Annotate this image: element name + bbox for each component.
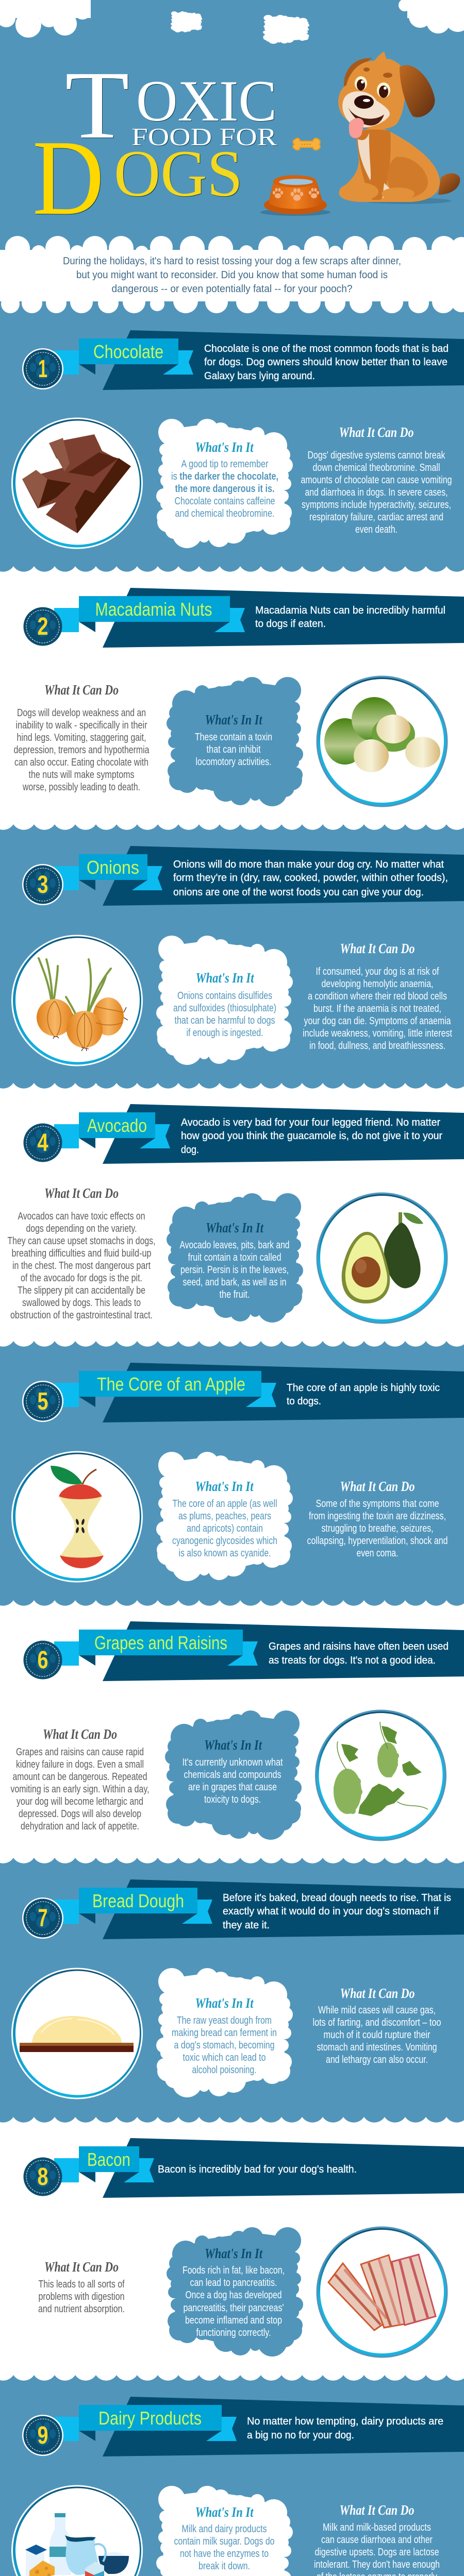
badge: number 9: 9 bbox=[37, 2422, 48, 2449]
callout: what's in it: that can be harmful to dogs bbox=[174, 1015, 275, 1026]
text block: what it can do: The slippery pit can accidentally be bbox=[18, 1285, 145, 1296]
icon: onions bbox=[11, 935, 143, 1066]
intro cloud band: but you might want to reconsider. Did you know that some human food is bbox=[76, 269, 388, 281]
callout: what's in it: What's In It bbox=[195, 1479, 254, 1494]
description: grapes: as treats for dogs. It's not a good idea. bbox=[269, 1655, 436, 1666]
description: bacon: Bacon is incredibly bad for your dog's health. bbox=[158, 2164, 357, 2175]
title: FOOD FOR bbox=[131, 123, 277, 151]
callout: what's in it: Chocolate contains caffeine bbox=[174, 496, 275, 507]
description: avocado bbox=[181, 1117, 442, 1156]
description: dairy: No matter how tempting, dairy products are bbox=[247, 2416, 443, 2427]
description: chocolate: Chocolate is one of the most common foods that is bad bbox=[204, 343, 449, 354]
callout: what's in it bbox=[167, 2227, 303, 2357]
text block: what it can do bbox=[38, 2259, 125, 2315]
text block: what it can do: They can cause upset stomachs in dogs, bbox=[7, 1235, 156, 1247]
description: bread dough bbox=[223, 1892, 451, 1931]
callout: what's in it: a dog's stomach, becoming bbox=[174, 2040, 274, 2051]
text block: what it can do: This leads to all sorts of bbox=[38, 2279, 125, 2290]
description: bread dough: exactly what it would do in your dog's stomach if bbox=[223, 1906, 439, 1917]
callout: what's in it: and sulfoxides (thiosulphate) bbox=[173, 1003, 276, 1014]
text block: what it can do bbox=[10, 1726, 150, 1832]
heading ribbon: the core of an apple: The Core of an Apple bbox=[97, 1374, 245, 1395]
text block: what it can do: can also occur. Eating chocolate with bbox=[14, 757, 148, 768]
text block: what it can do: stomach and intestines. Vomiting bbox=[317, 2042, 437, 2053]
icon: dog bone bbox=[293, 138, 320, 150]
callout: what's in it: and chemical theobromine. bbox=[175, 508, 274, 519]
text block: what it can do: even coma. bbox=[357, 1548, 398, 1559]
text block: what it can do: Dogs will develop weakness and an bbox=[17, 707, 146, 719]
text block: what it can do: What It Can Do bbox=[43, 1726, 117, 1742]
callout: what's in it bbox=[156, 1968, 293, 2097]
callout: what's in it: chemicals and compounds bbox=[184, 1769, 281, 1781]
description: avocado: Avocado is very bad for your four legged friend. No matter bbox=[181, 1117, 440, 1128]
callout: what's in it: as plums, peaches, pears bbox=[178, 1511, 271, 1522]
heading ribbon: grapes and raisins bbox=[54, 1621, 464, 1681]
panel: 7 bread dough bbox=[11, 1879, 464, 2099]
title: D bbox=[32, 118, 104, 238]
callout: what's in it: become inflamed and stop bbox=[185, 2315, 282, 2326]
text block: what it can do: What It Can Do bbox=[44, 682, 119, 698]
text block: what it can do: problems with digestion bbox=[38, 2291, 125, 2302]
description: apple bbox=[287, 1382, 440, 1407]
text block: what it can do: inability to walk - specifically in their bbox=[15, 720, 147, 731]
callout: what's in it: are in grapes that cause bbox=[188, 1782, 277, 1793]
badge: number 4 bbox=[24, 1123, 62, 1162]
callout: what's in it bbox=[156, 1452, 293, 1581]
callout: what's in it: that can inhibit bbox=[206, 744, 261, 755]
callout: what's in it: fruit contain a toxin called bbox=[188, 1252, 281, 1263]
callout: what's in it: not have the enzymes to bbox=[180, 2548, 269, 2560]
callout: what's in it: making bread can ferment in bbox=[172, 2027, 277, 2039]
callout: what's in it: toxicity to dogs. bbox=[204, 1794, 261, 1805]
callout: what's in it: What's In It bbox=[206, 1220, 264, 1235]
callout: what's in it: break it down. bbox=[198, 2561, 250, 2572]
badge: number 1: 1 bbox=[38, 355, 47, 383]
heading ribbon: chocolate bbox=[54, 330, 464, 390]
callout: what's in it: is also known as cyanide. bbox=[178, 1548, 271, 1559]
text block: what it can do: Avocados can have toxic effects on bbox=[18, 1211, 145, 1222]
description: onions: onions are one of the worst foods you can give your dog. bbox=[173, 887, 424, 898]
panel: 6 grapes and raisins bbox=[10, 1621, 464, 1841]
description: chocolate bbox=[204, 343, 449, 382]
callout: what's in it: can lead to pancreatitis. bbox=[190, 2277, 277, 2289]
callout: what's in it: Milk and dairy products bbox=[181, 2523, 267, 2535]
badge: number 2: 2 bbox=[37, 613, 48, 640]
description: onions: Onions will do more than make your dog cry. No matter what bbox=[173, 859, 444, 870]
description: chocolate: for dogs. Dog owners should know better than to leave bbox=[204, 357, 448, 368]
callout: what's in it: What's In It bbox=[204, 1737, 262, 1753]
callout: what's in it bbox=[156, 419, 293, 548]
heading ribbon: dairy products bbox=[54, 2397, 464, 2456]
callout: what's in it: Onions contains disulfides bbox=[177, 990, 272, 1002]
callout: what's in it: toxic which can lead to bbox=[183, 2052, 266, 2063]
text block: what it can do bbox=[307, 1479, 448, 1559]
badge: number 2 bbox=[24, 607, 62, 646]
text block: what it can do bbox=[314, 2502, 440, 2576]
intro cloud band: During the holidays, it's hard to resist tossing your dog a few scraps after dinner, bbox=[63, 256, 401, 267]
text block: what it can do: struggling to breathe, seizures, bbox=[322, 1523, 433, 1534]
heading ribbon: bread dough bbox=[54, 1879, 464, 1939]
heading ribbon: onions: Onions bbox=[87, 857, 139, 878]
heading ribbon: bacon bbox=[54, 2138, 464, 2198]
panel: 8 bacon bbox=[24, 2138, 464, 2358]
callout: what's in it: Foods rich in fat, like bacon, bbox=[183, 2265, 285, 2276]
badge: number 6: 6 bbox=[37, 1647, 48, 1674]
text block: what it can do: much of it could rupture their bbox=[324, 2029, 430, 2041]
description: avocado: how good you think the guacamole is, do not give it to your bbox=[181, 1130, 442, 1142]
text block: what it can do: can cause diarrhoea and other bbox=[321, 2534, 433, 2546]
text block: what it can do: of the avocado for dogs is the pit. bbox=[21, 1273, 142, 1284]
title: OXIC bbox=[136, 69, 277, 133]
callout: what's in it: alcohol poisoning. bbox=[192, 2064, 257, 2076]
icon: dairy products bbox=[11, 2485, 143, 2576]
description: avocado: dog. bbox=[181, 1144, 199, 1156]
callout: what's in it: Avocado leaves, pits, bark and bbox=[179, 1240, 290, 1251]
text block: what it can do: depression, tremors and hypothermia bbox=[13, 744, 150, 756]
icon: bacon bbox=[317, 2227, 448, 2358]
icon: apple core bbox=[11, 1451, 143, 1583]
callout: what's in it: What's In It bbox=[205, 712, 263, 727]
title: OGS bbox=[114, 137, 243, 210]
panel: 4 avocado bbox=[7, 1104, 464, 1324]
panel: 5 the core of an apple bbox=[11, 1363, 464, 1583]
text block: what it can do: the nuts will make symptoms bbox=[29, 769, 134, 781]
icon: grapes bbox=[315, 1709, 446, 1841]
heading ribbon: macadamia nuts: Macadamia Nuts bbox=[95, 599, 212, 620]
description: onions bbox=[173, 859, 448, 898]
icon: chocolate bbox=[11, 417, 143, 549]
callout: what's in it: if enough is ingested. bbox=[187, 1027, 263, 1039]
icon: food bowl bbox=[260, 175, 330, 216]
heading ribbon: grapes and raisins: Grapes and Raisins bbox=[94, 1632, 227, 1653]
description: onions: form they're in (dry, raw, cooked, powder, within other foods), bbox=[173, 872, 448, 884]
badge: number 3: 3 bbox=[37, 871, 48, 899]
text block: what it can do: What It Can Do bbox=[44, 2259, 119, 2275]
icon: bread dough bbox=[11, 1968, 143, 2099]
text block: what it can do: What It Can Do bbox=[339, 425, 413, 440]
heading ribbon: macadamia nuts bbox=[54, 588, 464, 648]
text block: what it can do: amount can be dangerous. Repeated bbox=[12, 1771, 147, 1783]
description: chocolate: Galaxy bars lying around. bbox=[204, 370, 315, 382]
heading ribbon: onions bbox=[54, 846, 464, 906]
callout: what's in it: A good tip to remember bbox=[181, 459, 269, 470]
panel: 2 macadamia nuts bbox=[13, 588, 464, 807]
callout: what's in it bbox=[165, 1710, 302, 1840]
text block: what it can do: and lethargy can also occur. bbox=[326, 2054, 428, 2065]
callout: what's in it: pancreatitis, their pancreas' bbox=[184, 2302, 284, 2314]
text block: what it can do: swallowed by dogs. This leads to bbox=[22, 1297, 141, 1309]
badge: number 8 bbox=[24, 2158, 62, 2196]
heading ribbon: avocado bbox=[54, 1104, 464, 1164]
callout: what's in it bbox=[167, 677, 303, 806]
text block: what it can do bbox=[13, 682, 150, 793]
panel: 3 onions bbox=[11, 846, 464, 1066]
icon: avocado bbox=[317, 1192, 448, 1324]
heading ribbon: chocolate: Chocolate bbox=[93, 341, 163, 362]
text block: what it can do bbox=[7, 1185, 156, 1321]
text block: what it can do: dogs depending on the variety. bbox=[26, 1223, 137, 1234]
description: macadamia bbox=[255, 605, 445, 630]
badge: number 5 bbox=[22, 1381, 63, 1422]
text block: what it can do: in the chest. The most dangerous part bbox=[12, 1260, 151, 1272]
callout: what's in it: and apricots) contain bbox=[187, 1523, 263, 1534]
text block: what it can do: What It Can Do bbox=[340, 941, 415, 956]
text block: what it can do: your dog will become lethargic and bbox=[16, 1796, 143, 1807]
intro cloud band bbox=[0, 236, 464, 313]
sky clouds bbox=[0, 0, 464, 44]
badge: number 3 bbox=[22, 864, 63, 905]
callout: what's in it: It's currently unknown what bbox=[183, 1757, 283, 1768]
callout: what's in it: These contain a toxin bbox=[195, 732, 272, 743]
callout: what's in it: persin. Persin is in the leaves, bbox=[180, 1264, 289, 1276]
text block: what it can do: obstruction of the gastrointestinal tract. bbox=[10, 1310, 153, 1321]
text block: what it can do: developing hemolytic anaemia, bbox=[322, 978, 433, 990]
callout: what's in it: locomotory activities. bbox=[196, 756, 271, 768]
text block: what it can do: worse, possibly leading to death. bbox=[22, 782, 140, 793]
text block: what it can do: dehydration and lack of appetite. bbox=[21, 1821, 139, 1832]
icon: puppy bbox=[338, 52, 460, 204]
description: macadamia: Macadamia Nuts can be incredibly harmful bbox=[255, 605, 445, 616]
callout: what's in it bbox=[156, 936, 293, 1065]
callout: what's in it: is the darker the chocolate, bbox=[171, 471, 278, 482]
description: bread dough: Before it's baked, bread dough needs to rise. That is bbox=[223, 1892, 451, 1904]
badge: number 7: 7 bbox=[38, 1905, 47, 1932]
text block: what it can do: What It Can Do bbox=[340, 1479, 415, 1494]
callout: what's in it: functioning correctly. bbox=[196, 2327, 271, 2338]
text block: what it can do: What It Can Do bbox=[340, 1986, 415, 2001]
heading ribbon: dairy products: Dairy Products bbox=[98, 2408, 202, 2429]
callout: what's in it bbox=[167, 1193, 303, 1323]
badge: number 7 bbox=[22, 1897, 63, 1939]
callout: what's in it: What's In It bbox=[195, 439, 254, 455]
badge: number 1 bbox=[22, 348, 63, 389]
description: dairy: a big no no for your dog. bbox=[247, 2430, 354, 2441]
text block: what it can do: depressed. Dogs will also develop bbox=[19, 1808, 141, 1820]
callout: what's in it: the fruit. bbox=[220, 1289, 250, 1300]
title bbox=[32, 51, 277, 238]
text block: what it can do: and nutrient absorption. bbox=[38, 2303, 125, 2315]
heading ribbon: avocado: Avocado bbox=[87, 1115, 147, 1136]
description: macadamia: to dogs if eaten. bbox=[255, 618, 326, 630]
callout: what's in it: The raw yeast dough from bbox=[177, 2015, 272, 2026]
title: T bbox=[65, 51, 129, 159]
text block: what it can do bbox=[301, 425, 452, 535]
badge: number 8: 8 bbox=[37, 2163, 48, 2191]
badge: number 9 bbox=[22, 2415, 63, 2456]
callout: what's in it: the more dangerous it is. bbox=[175, 483, 274, 495]
text block: what it can do: breathing difficulties and fluid build-up bbox=[11, 1248, 152, 1259]
text block: what it can do: kidney failure in dogs. Even a small bbox=[16, 1759, 144, 1770]
callout: what's in it: What's In It bbox=[195, 2504, 254, 2520]
icon: macadamia nuts bbox=[317, 676, 448, 807]
text block: what it can do: What It Can Do bbox=[339, 2502, 415, 2518]
text block: what it can do: While mild cases will cause gas, bbox=[318, 2005, 436, 2016]
callout: what's in it bbox=[156, 2486, 293, 2576]
badge: number 4: 4 bbox=[37, 1129, 48, 1157]
text block: what it can do: vomiting is an early sign. Within a day, bbox=[10, 1784, 150, 1795]
heading ribbon: the core of an apple bbox=[54, 1363, 464, 1422]
text block: what it can do bbox=[303, 941, 452, 1052]
panel: header bbox=[0, 0, 464, 313]
callout: what's in it: cyanogenic glycosides which bbox=[172, 1535, 277, 1547]
text block: what it can do: Grapes and raisins can cause rapid bbox=[16, 1747, 144, 1758]
panel: 9 dairy products bbox=[11, 2397, 464, 2576]
heading ribbon: bacon: Bacon bbox=[87, 2149, 130, 2170]
description: dairy bbox=[247, 2416, 443, 2441]
text block: what it can do: What It Can Do bbox=[44, 1185, 119, 1201]
callout: what's in it: What's In It bbox=[196, 970, 255, 986]
description: grapes: Grapes and raisins have often been used bbox=[269, 1641, 449, 1652]
callout: what's in it: contain milk sugar. Dogs do bbox=[174, 2536, 274, 2547]
text block: what it can do: even death. bbox=[355, 524, 397, 535]
callout: what's in it: What's In It bbox=[195, 1995, 254, 2011]
description: grapes bbox=[269, 1641, 449, 1666]
text block: what it can do: hind legs. Vomiting, staggering gait, bbox=[16, 732, 146, 743]
heading ribbon: bread dough: Bread Dough bbox=[92, 1890, 184, 1911]
badge: number 5: 5 bbox=[37, 1388, 48, 1415]
text block: what it can do: Milk and milk-based products bbox=[323, 2522, 431, 2533]
badge: number 6 bbox=[24, 1640, 62, 1680]
panel: 1 chocolate bbox=[11, 330, 464, 549]
callout: what's in it: What's In It bbox=[205, 2246, 263, 2261]
callout: what's in it: The core of an apple (as well bbox=[172, 1498, 277, 1510]
callout: what's in it: Once a dog has developed bbox=[186, 2290, 281, 2301]
intro cloud band: dangerous -- or even potentially fatal -- for your pooch? bbox=[111, 283, 353, 295]
description: bread dough: they ate it. bbox=[223, 1920, 270, 1931]
description: apple: The core of an apple is highly toxic bbox=[287, 1382, 440, 1394]
text block: what it can do bbox=[312, 1986, 441, 2065]
description: apple: to dogs. bbox=[287, 1396, 321, 1407]
callout: what's in it: seed, and bark, as well as in bbox=[183, 1277, 287, 1288]
